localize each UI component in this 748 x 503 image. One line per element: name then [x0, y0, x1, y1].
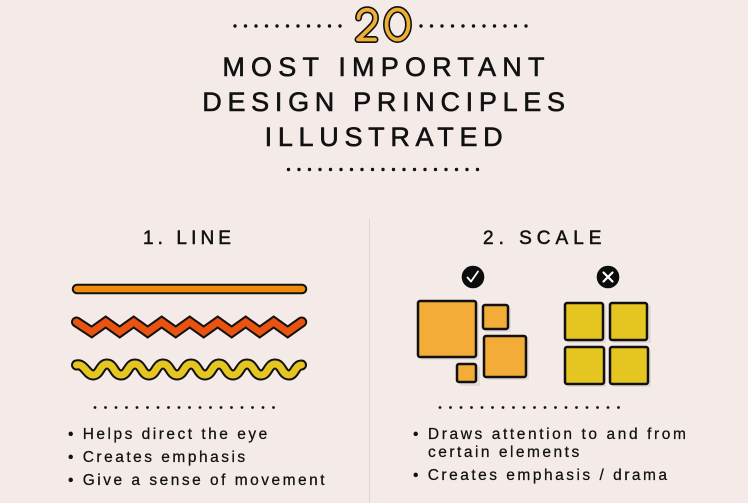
- panel: line: [68, 228, 327, 489]
- panel: scale: [413, 228, 689, 484]
- heading: 1. Line: 1. LINE: [143, 228, 235, 249]
- bullet list: [413, 426, 689, 484]
- even scale squares: [564, 302, 651, 387]
- dotted rule: [438, 406, 620, 409]
- good scale squares: [416, 300, 529, 386]
- bullet list: • Draws attention to and from: [413, 426, 689, 443]
- dotted rule: [94, 406, 275, 409]
- bullet list: [68, 426, 327, 489]
- heading: 2. Scale: 2. SCALE: [483, 228, 606, 249]
- title: [202, 52, 571, 152]
- header number 20 with dotted rules: [233, 6, 528, 43]
- line examples: [71, 284, 308, 380]
- bullet list: • Creates emphasis: [68, 449, 248, 466]
- title: ILLUSTRATED: [265, 122, 508, 152]
- icon: check: [462, 266, 484, 288]
- bullet list: • Helps direct the eye: [68, 426, 270, 443]
- bullet list: • Give a sense of movement: [68, 472, 327, 489]
- icon: cross: [596, 266, 620, 288]
- bullet list: certain elements: [428, 444, 582, 461]
- title: DESIGN PRINCIPLES: [202, 87, 571, 117]
- title: MOST IMPORTANT: [222, 52, 551, 82]
- bullet list: • Creates emphasis / drama: [413, 467, 670, 484]
